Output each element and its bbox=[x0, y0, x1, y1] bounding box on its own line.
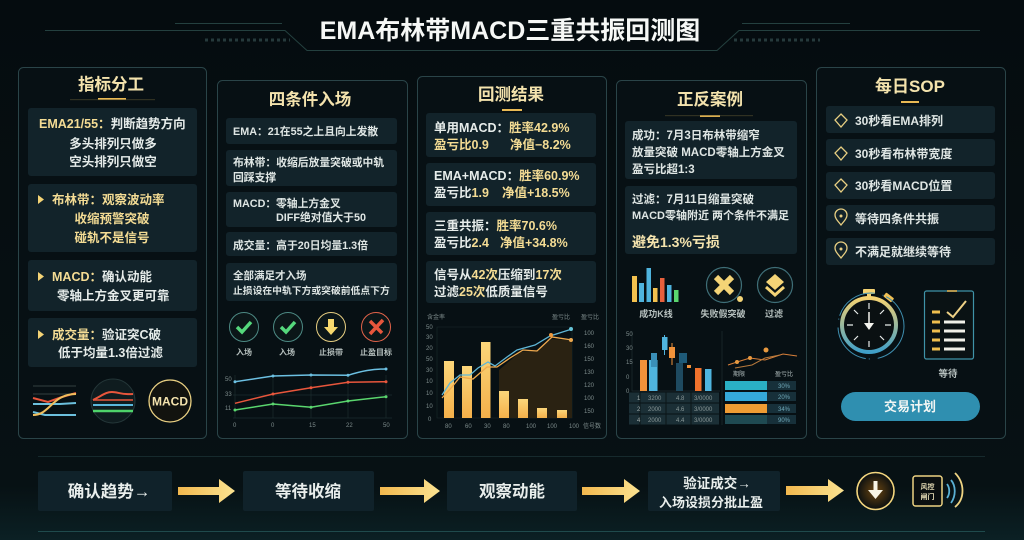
item: 等待共振: 等待四条件共振 bbox=[855, 211, 939, 226]
item: 布林带: 30秒看布林带宽度 bbox=[855, 146, 952, 161]
icon: stop loss arrow: 止损带 bbox=[319, 347, 343, 357]
card: 布林带 condition: 回踩支撑 bbox=[233, 170, 276, 184]
heading: 四条件入场: 四条件入场 bbox=[269, 89, 351, 109]
card: 信号压缩: 过滤25次低质量信号 bbox=[434, 284, 548, 299]
title frame ornament bbox=[45, 24, 980, 50]
icon: filter bbox=[758, 268, 792, 319]
heading: 每日SOP: 每日SOP bbox=[875, 77, 945, 96]
panel: 正反案例 bbox=[616, 80, 806, 438]
card: 过滤案例 bbox=[625, 186, 797, 254]
card: 三重共振 bbox=[426, 212, 596, 255]
card: MACD condition bbox=[226, 192, 397, 227]
card: 布林带: 布林带：观察波动率 bbox=[52, 192, 165, 207]
combo chart: 10 bbox=[426, 391, 433, 397]
card: 过滤案例: MACD零轴附近 两个条件不满足 bbox=[632, 208, 789, 222]
card: MACD bbox=[28, 260, 197, 311]
card: MACD condition: DIFF绝对值大于50 bbox=[276, 210, 366, 224]
data table: 4.4 bbox=[676, 418, 685, 424]
combo chart: 150 bbox=[584, 357, 595, 363]
data table bbox=[629, 392, 719, 425]
icon: EMA lines bbox=[33, 386, 76, 415]
heading: 指标分工: 指标分工 bbox=[78, 75, 144, 94]
card: 布林带 condition: 布林带：收缩后放量突破或中轨 bbox=[233, 155, 384, 169]
combo chart: 100 bbox=[569, 424, 580, 430]
combo chart: 100 bbox=[584, 331, 595, 337]
item: 继续等待 bbox=[826, 238, 995, 265]
item: EMA bbox=[826, 106, 995, 133]
combo chart: 100 bbox=[526, 424, 537, 430]
item: EMA: 30秒看EMA排列 bbox=[855, 113, 943, 128]
card: 三重共振: 净值+34.8% bbox=[500, 235, 568, 250]
data table: 4.8 bbox=[676, 396, 685, 402]
card: EMA: 空头排列只做空 bbox=[69, 154, 157, 169]
combo chart: 100 bbox=[547, 424, 558, 430]
icon: door with signal bbox=[913, 473, 962, 507]
combo chart: 120 bbox=[584, 383, 595, 389]
data table: 3/0000 bbox=[694, 418, 713, 424]
card: 单用MACD: 单用MACD：胜率42.9% bbox=[434, 120, 569, 135]
line chart: 0 bbox=[233, 423, 237, 429]
card: MACD condition: MACD： bbox=[233, 198, 276, 210]
icon: stopwatch bbox=[838, 289, 904, 359]
candlestick chart bbox=[626, 331, 722, 425]
card: 成交量: 低于均量1.3倍过滤 bbox=[58, 345, 163, 360]
combo chart: 60 bbox=[465, 424, 472, 430]
flow step: 验证成交: 验证成交→ bbox=[683, 475, 751, 491]
flow step: 观察动能: 观察动能 bbox=[479, 481, 546, 501]
card: 成交量 bbox=[28, 318, 197, 367]
data table: 1 bbox=[637, 396, 641, 402]
card: 成交量 condition: 成交量：高于20日均量1.3倍 bbox=[233, 238, 368, 252]
card: MACD: 零轴上方金叉更可靠 bbox=[57, 288, 170, 303]
horizontal metric bars bbox=[725, 381, 796, 424]
icon: check entry 2 bbox=[274, 312, 302, 357]
line chart: 22 bbox=[346, 423, 353, 429]
candlestick chart: 15 bbox=[626, 360, 633, 366]
card: EMA bbox=[28, 108, 197, 176]
flow step: 验证成交 bbox=[648, 471, 780, 511]
card: EMA: EMA21/55：判断趋势方向 bbox=[39, 116, 186, 131]
data table: 2000 bbox=[648, 407, 662, 413]
line chart bbox=[225, 368, 392, 429]
icon: checklist bbox=[924, 291, 974, 380]
card: 成交量: 成交量：验证突C破 bbox=[52, 327, 162, 342]
card: 布林带 bbox=[28, 184, 197, 252]
combo chart: 盈亏比 bbox=[581, 313, 599, 321]
card: 成功案例: 成功：7月3日布林带缩窄 bbox=[632, 128, 760, 142]
item: MACD bbox=[826, 172, 995, 199]
card: 布林带 condition bbox=[226, 150, 397, 186]
icon: down arrow circle bbox=[857, 472, 894, 510]
candlestick chart: 0 bbox=[626, 389, 630, 395]
candlestick chart: 50 bbox=[626, 332, 633, 338]
card: 布林带: 碰轨不是信号 bbox=[74, 230, 150, 245]
combo chart: 信号数 bbox=[583, 422, 601, 430]
flow step: 观察动能 bbox=[447, 471, 577, 511]
icon: MACD badge: MACD bbox=[152, 394, 188, 408]
card: 成交量 condition bbox=[226, 232, 397, 256]
icon: Bollinger bands bbox=[91, 379, 135, 423]
mini line chart: 盈亏比 bbox=[775, 370, 793, 378]
card: MACD condition: 零轴上方金叉 bbox=[276, 196, 341, 210]
mini line chart bbox=[728, 348, 797, 378]
data table: 3/0000 bbox=[694, 407, 713, 413]
horizontal metric bars: 34% bbox=[778, 407, 791, 413]
icon: check entry 1 bbox=[230, 312, 258, 357]
icon: success bars bbox=[632, 268, 678, 319]
card: EMA+MACD bbox=[426, 163, 596, 206]
horizontal metric bars: 90% bbox=[778, 418, 791, 424]
item: 继续等待: 不满足就继续等待 bbox=[855, 244, 951, 259]
card: 布林带: 收缩预警突破 bbox=[74, 211, 150, 226]
candlestick chart: 0 bbox=[626, 375, 630, 381]
title: EMA布林带MACD三重共振回测图 bbox=[320, 17, 700, 45]
icon: door with signal: 闸门 bbox=[920, 492, 934, 501]
combo chart: 10 bbox=[426, 379, 433, 385]
card: 信号压缩: 信号从42次压缩到17次 bbox=[434, 267, 562, 282]
card: EMA+MACD: 净值+18.5% bbox=[502, 185, 570, 200]
icon: filter: 过滤 bbox=[765, 308, 783, 319]
label: 等待: 等待 bbox=[938, 368, 958, 380]
line chart: 11 bbox=[225, 406, 232, 412]
combo chart: 30 bbox=[426, 335, 433, 341]
data table: 2000 bbox=[648, 418, 662, 424]
flow step: 验证成交: 入场设损分批止盈 bbox=[659, 495, 763, 510]
data table: 3200 bbox=[648, 396, 662, 402]
icon: check entry 2: 入场 bbox=[279, 347, 295, 357]
combo chart: 10 bbox=[426, 404, 433, 410]
combo chart: 160 bbox=[584, 344, 595, 350]
combo chart: 盈亏比 bbox=[552, 313, 570, 321]
card: 成功案例 bbox=[625, 121, 797, 179]
card: EMA+MACD: 盈亏比1.9 bbox=[434, 186, 489, 200]
panel: 四条件入场 bbox=[218, 80, 408, 438]
button: 交易计划 bbox=[841, 392, 980, 421]
combo chart: 30 bbox=[484, 424, 491, 430]
panel: 回测结果 bbox=[418, 76, 606, 438]
card: EMA+MACD: EMA+MACD：胜率60.9% bbox=[434, 168, 580, 183]
data table: 4.6 bbox=[676, 407, 685, 413]
arrow 2 bbox=[380, 479, 440, 503]
combo chart: 30 bbox=[426, 368, 433, 374]
card: 全部满足: 全部满足才入场 bbox=[233, 269, 307, 282]
card: 信号压缩 bbox=[426, 261, 596, 303]
card: 全部满足: 止损设在中轨下方或突破前低点下方 bbox=[233, 284, 390, 297]
data table: 4 bbox=[637, 418, 641, 424]
icon: door with signal: 风控 bbox=[920, 482, 934, 491]
card: 单用MACD: 净值−8.2% bbox=[510, 137, 571, 152]
bottom flow frame bbox=[38, 456, 985, 532]
card: 三重共振: 盈亏比2.4 bbox=[434, 236, 489, 250]
mini line chart: 期限 bbox=[733, 370, 745, 378]
card: EMA: 多头排列只做多 bbox=[69, 136, 157, 151]
icon: stop loss arrow bbox=[316, 312, 346, 357]
heading: 正反案例: 正反案例 bbox=[677, 89, 743, 109]
panel: 每日SOP bbox=[816, 68, 1006, 438]
line chart: 15 bbox=[309, 423, 316, 429]
icon: success bars: 成功K线 bbox=[639, 308, 673, 319]
flow step: 确认趋势: 确认趋势→ bbox=[68, 482, 150, 501]
combo chart: 80 bbox=[445, 424, 452, 430]
flow step: 等待收缩 bbox=[243, 471, 374, 511]
card: 三重共振: 三重共振：胜率70.6% bbox=[434, 218, 557, 233]
card: MACD: MACD：确认动能 bbox=[52, 269, 153, 284]
line chart: 0 bbox=[271, 423, 275, 429]
icon: take profit cross: 止盈目标 bbox=[360, 347, 392, 357]
arrow 4 bbox=[786, 479, 844, 502]
icon: failed breakout: 失败假突破 bbox=[700, 308, 746, 319]
combo chart: 50 bbox=[426, 325, 433, 331]
combo chart: 150 bbox=[584, 409, 595, 415]
flow step: 确认趋势 bbox=[38, 471, 172, 511]
combo chart: 含金率 bbox=[427, 313, 445, 321]
item: MACD: 30秒看MACD位置 bbox=[855, 178, 952, 193]
combo chart: 0 bbox=[428, 417, 432, 423]
horizontal metric bars: 30% bbox=[778, 384, 791, 390]
card: 单用MACD: 盈亏比0.9 bbox=[434, 138, 489, 152]
data table: 2 bbox=[637, 407, 641, 413]
arrow 3 bbox=[582, 479, 640, 503]
line chart: 33 bbox=[225, 392, 232, 398]
combo chart: 50 bbox=[426, 357, 433, 363]
horizontal metric bars: 20% bbox=[778, 395, 791, 401]
arrow 1 bbox=[178, 479, 235, 503]
data table: 3/0000 bbox=[694, 396, 713, 402]
icon: check entry 1: 入场 bbox=[236, 347, 252, 357]
line chart: 50 bbox=[383, 423, 390, 429]
flow step: 等待收缩: 等待收缩 bbox=[275, 481, 341, 501]
heading: 回测结果: 回测结果 bbox=[478, 85, 544, 104]
card: EMA condition bbox=[226, 118, 397, 144]
icon: failed breakout bbox=[700, 268, 746, 319]
icon: MACD badge bbox=[149, 380, 191, 422]
combo chart: 130 bbox=[584, 370, 595, 376]
card: 过滤案例: 过滤：7月11日缩量突破 bbox=[632, 192, 755, 206]
line chart: 50 bbox=[225, 377, 232, 383]
card: EMA condition: EMA：21在55之上且向上发散 bbox=[233, 124, 378, 138]
combo chart bbox=[426, 313, 601, 430]
combo chart: 20 bbox=[426, 346, 433, 352]
card: 成功案例: 放量突破 MACD零轴上方金叉 bbox=[632, 145, 785, 159]
card: 全部满足 bbox=[226, 263, 397, 301]
candlestick chart: 30 bbox=[626, 346, 633, 352]
card: 成功案例: 盈亏比超1:3 bbox=[632, 162, 695, 176]
button: 交易计划: 交易计划 bbox=[884, 399, 936, 414]
combo chart: 100 bbox=[584, 396, 595, 402]
panel: 指标分工 bbox=[18, 68, 206, 438]
item: 等待共振 bbox=[826, 205, 995, 231]
card: 过滤案例: 避免1.3%亏损 bbox=[632, 234, 720, 250]
icon: take profit cross bbox=[360, 312, 392, 357]
item: 布林带 bbox=[826, 139, 995, 166]
card: 单用MACD bbox=[426, 113, 596, 157]
combo chart: 80 bbox=[503, 424, 510, 430]
